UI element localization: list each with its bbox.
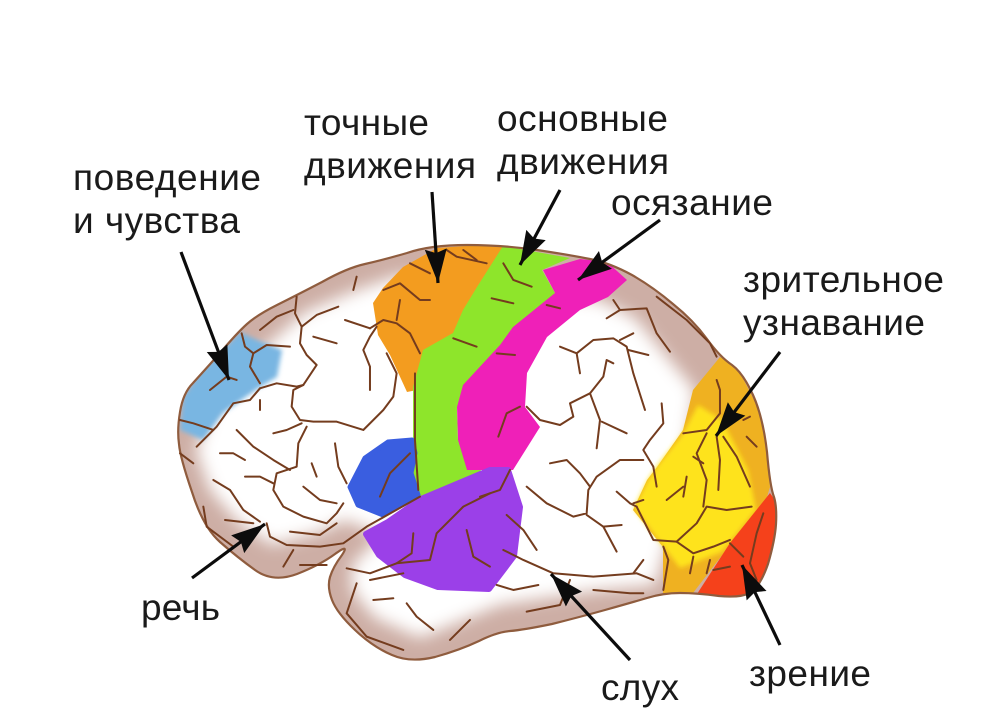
sulci left half: [180, 250, 490, 650]
area: fine movement orange: [373, 244, 510, 392]
label: осязание: осязание: [611, 182, 773, 223]
label: поведение и чувства: поведение: [73, 157, 261, 198]
arrow: основные движения: [520, 190, 560, 265]
arrow: речь: [192, 524, 265, 578]
label: слух: слух: [601, 667, 680, 708]
infographic: brain functional areas: [76, 111, 942, 708]
brain outline: [178, 245, 776, 660]
arrow: зрительное узнавание: [716, 352, 780, 436]
arrow: точные движения: [432, 192, 438, 283]
label: зрение: зрение: [749, 653, 871, 694]
area: frontal behaviour: [180, 332, 282, 440]
arrow: зрение: [742, 565, 780, 645]
white cortex interior: [196, 275, 695, 638]
area: occipital gold: [633, 357, 770, 593]
label: точные движения: движения: [304, 145, 476, 186]
area: blue: [350, 440, 418, 515]
label: зрительное узнавание: зрительное: [743, 259, 944, 300]
brain rim fill: [178, 245, 776, 660]
label: речь: речь: [141, 587, 220, 628]
sulci right half: [480, 263, 763, 612]
label: точные движения: точные: [304, 102, 429, 143]
label: основные движения: движения: [497, 141, 669, 182]
area: touch magenta: [457, 259, 627, 470]
label: основные движения: [497, 98, 669, 182]
area: basic movement green: [413, 246, 570, 497]
arrow: осязание: [578, 220, 660, 280]
label: поведение и чувства: [73, 157, 261, 241]
label: зрительное узнавание: узнавание: [743, 302, 925, 343]
label: поведение и чувства: и чувства: [73, 200, 240, 241]
brain illustration: [178, 244, 780, 660]
area: occipital bright yellow: [634, 405, 756, 568]
area: hearing purple: [366, 470, 520, 589]
label: точные движения: [304, 102, 476, 186]
label: зрительное узнавание: [743, 259, 944, 343]
area: vision red: [697, 493, 780, 600]
arrow: слух: [551, 574, 630, 660]
arrow: поведение и чувства: [181, 252, 229, 380]
label: основные движения: основные: [497, 98, 668, 139]
